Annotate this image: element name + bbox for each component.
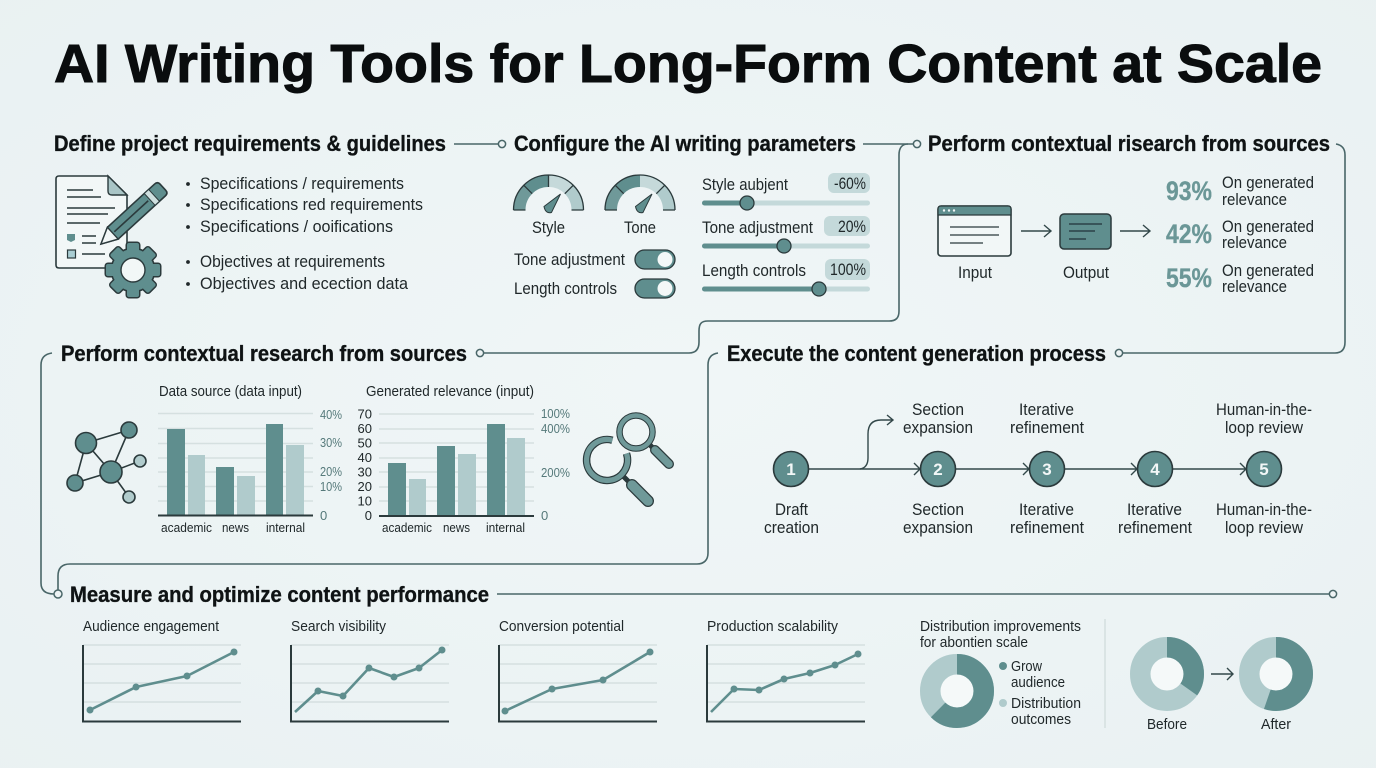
slider: style: -60%: [834, 175, 866, 193]
bar chart: generated relevance: 50: [358, 436, 372, 450]
step 3: 3: [1042, 460, 1052, 479]
donut chart: after: [1249, 647, 1303, 733]
stat: 55%: On generated: [1222, 262, 1314, 280]
stat: 42%: On generated: [1222, 218, 1314, 236]
line chart: search visibility: Search visibility: [291, 618, 386, 635]
step 5: Human-in-the-: [1216, 501, 1312, 519]
bullet list: Objectives at requirements: [200, 253, 385, 271]
slider: tone: 20%: [838, 218, 866, 236]
step 4: 4: [1150, 460, 1160, 479]
gauge labels: Style: [532, 219, 565, 237]
step 3: [1010, 401, 1084, 537]
heading: contextual research: Perform contextual research from sources: [61, 341, 467, 366]
flow labels: Input: [958, 264, 992, 282]
bar chart: generated relevance: 30: [358, 464, 372, 480]
gauge: tone: [605, 175, 675, 213]
step 2: Section: [912, 401, 964, 419]
stat: 55%: [1166, 262, 1314, 296]
slider: length: 100%: [830, 261, 866, 279]
donut chart: distribution improvements: for abontien scale: [920, 634, 1028, 651]
stat: 55%: 55%: [1166, 263, 1212, 293]
flow labels: Output: [1063, 264, 1109, 282]
arrow: [1120, 225, 1150, 237]
bar chart: generated relevance: 10: [358, 494, 372, 508]
heading: define requirements: Define project requirements & guidelines: [54, 131, 446, 156]
icon: input window: [938, 206, 1011, 256]
bar chart: generated relevance: 100%: [541, 406, 570, 421]
line chart: production scalability: Production scalability: [707, 618, 838, 635]
step 1: creation: [764, 519, 819, 537]
heading: execute process: Execute the content generation process: [727, 341, 1106, 366]
step 5: [1216, 401, 1312, 537]
connector lines between steps: [41, 140, 1345, 598]
bar chart: generated relevance: 40: [358, 450, 372, 465]
bar chart: data source: 10%: [320, 479, 342, 494]
donut chart: before: Before: [1147, 716, 1187, 733]
stat: 93%: [1166, 174, 1314, 209]
donut chart: after: After: [1261, 716, 1291, 733]
step 3: refinement: [1010, 519, 1084, 537]
panel: configure parameters: [514, 131, 870, 298]
stat: 42%: [1166, 218, 1314, 252]
bar chart: data source: 20%: [320, 464, 342, 479]
step 2: expansion: [903, 419, 973, 437]
donut chart: distribution improvements: outcomes: [1011, 711, 1071, 728]
gauge labels: Tone: [624, 219, 656, 237]
icon: document, pencil and gear: [56, 176, 168, 297]
icon: magnifying glasses: [587, 416, 669, 501]
step 2: expansion: [903, 519, 973, 537]
bullet list: [186, 175, 423, 293]
step 3: Iterative: [1019, 401, 1074, 419]
panel: measure and optimize: [70, 582, 1303, 733]
icon: output box: [1060, 214, 1111, 249]
step 5: loop review: [1225, 419, 1303, 437]
step 1: Draft: [775, 501, 808, 519]
bar chart: generated relevance: 0: [365, 508, 372, 523]
line chart: conversion potential: Conversion potential: [499, 618, 624, 635]
panel: research from sources charts: [61, 341, 669, 535]
bar chart: generated relevance: [358, 383, 570, 535]
slider: length: Length controls: [702, 262, 806, 280]
step 4: refinement: [1118, 519, 1192, 537]
bar chart: data source: academic: [161, 520, 212, 535]
stat: 93%: 93%: [1166, 176, 1212, 206]
bullet list: Specifications / requirements: [200, 175, 404, 193]
gauge labels: [532, 219, 656, 237]
toggle: length controls: [514, 279, 675, 298]
toggle: tone adjustment: Tone adjustment: [514, 251, 625, 269]
donut chart: distribution improvements: Grow: [1011, 658, 1042, 675]
bar chart: data source: 0: [320, 508, 327, 523]
bar chart: generated relevance: 20: [358, 479, 372, 494]
panel: define project requirements: [54, 131, 446, 297]
heading: contextual risearch: Perform contextual risearch from sources: [928, 131, 1330, 156]
bullet list: Specifications / ooifications: [200, 218, 393, 236]
donut chart: before: [1140, 647, 1194, 733]
step 2: 2: [933, 460, 943, 479]
arrow: before to after: [1211, 668, 1233, 680]
bar chart: generated relevance: Generated relevance (input): [366, 383, 534, 400]
line chart: search visibility: [291, 618, 449, 722]
slider: tone: [702, 216, 870, 253]
line chart: audience engagement: [83, 618, 241, 722]
bar chart: generated relevance: 400%: [541, 421, 570, 436]
bar chart: generated relevance: 60: [358, 421, 372, 436]
donut chart: distribution improvements: Distribution improvements: [920, 618, 1081, 635]
arrows between steps: [809, 415, 1246, 475]
stat: 93%: On generated: [1222, 174, 1314, 192]
line chart: conversion potential: [499, 618, 657, 722]
step 2: Section: [912, 501, 964, 519]
step 1: [764, 452, 819, 537]
bar chart: data source: internal: [266, 520, 305, 535]
flow labels: [958, 264, 1109, 282]
arrow: [1021, 225, 1051, 237]
bar chart: data source: news: [222, 520, 249, 535]
bar chart: data source: Data source (data input): [159, 383, 302, 400]
slider: length: [702, 259, 870, 296]
donut chart: distribution improvements: [920, 618, 1081, 728]
bullet list: Specifications red requirements: [200, 196, 423, 214]
bar chart: generated relevance: internal: [486, 520, 525, 535]
slider: tone: Tone adjustment: [702, 219, 813, 237]
line chart: audience engagement: Audience engagement: [83, 618, 220, 635]
step 3: Iterative: [1019, 501, 1074, 519]
step 1: 1: [786, 460, 796, 479]
bar chart: generated relevance: 0: [541, 508, 548, 523]
step 5: Human-in-the-: [1216, 401, 1312, 419]
title: AI Writing Tools for Long-Form Content at Scale: [54, 34, 1322, 94]
line chart: production scalability: [707, 618, 865, 722]
bar chart: data source: 30%: [320, 435, 342, 450]
panel: content generation process: [727, 341, 1312, 537]
step 4: Iterative: [1127, 501, 1182, 519]
stat: 42%: relevance: [1222, 234, 1287, 252]
step 2: [903, 401, 973, 537]
slider: style: Style aubjent: [702, 176, 788, 194]
step 5: loop review: [1225, 519, 1303, 537]
bar chart: generated relevance: 70: [358, 406, 372, 422]
bar chart: generated relevance: news: [443, 520, 470, 535]
icon: network graph: [67, 422, 146, 503]
stat: 93%: relevance: [1222, 191, 1287, 209]
bar chart: data source: 40%: [320, 407, 342, 422]
stat: 42%: 42%: [1166, 219, 1212, 249]
stat: 55%: relevance: [1222, 278, 1287, 296]
step 4: [1118, 452, 1192, 537]
donut chart: distribution improvements: audience: [1011, 674, 1065, 691]
panel: contextual research flow and stats: [928, 131, 1330, 296]
toggle: length controls: Length controls: [514, 280, 617, 298]
step 3: refinement: [1010, 419, 1084, 437]
bar chart: generated relevance: academic: [382, 520, 432, 535]
heading: configure parameters: Configure the AI writing parameters: [514, 131, 856, 156]
slider: style: [702, 173, 870, 210]
heading: measure performance: Measure and optimize content performance: [70, 582, 489, 607]
donut chart: distribution improvements: Distribution: [1011, 695, 1081, 712]
bar chart: data source: [158, 383, 342, 535]
bar chart: generated relevance: 200%: [541, 465, 570, 480]
gauge: style: [514, 175, 584, 213]
step 5: 5: [1259, 460, 1269, 479]
bullet list: Objectives and ecection data: [200, 275, 409, 293]
